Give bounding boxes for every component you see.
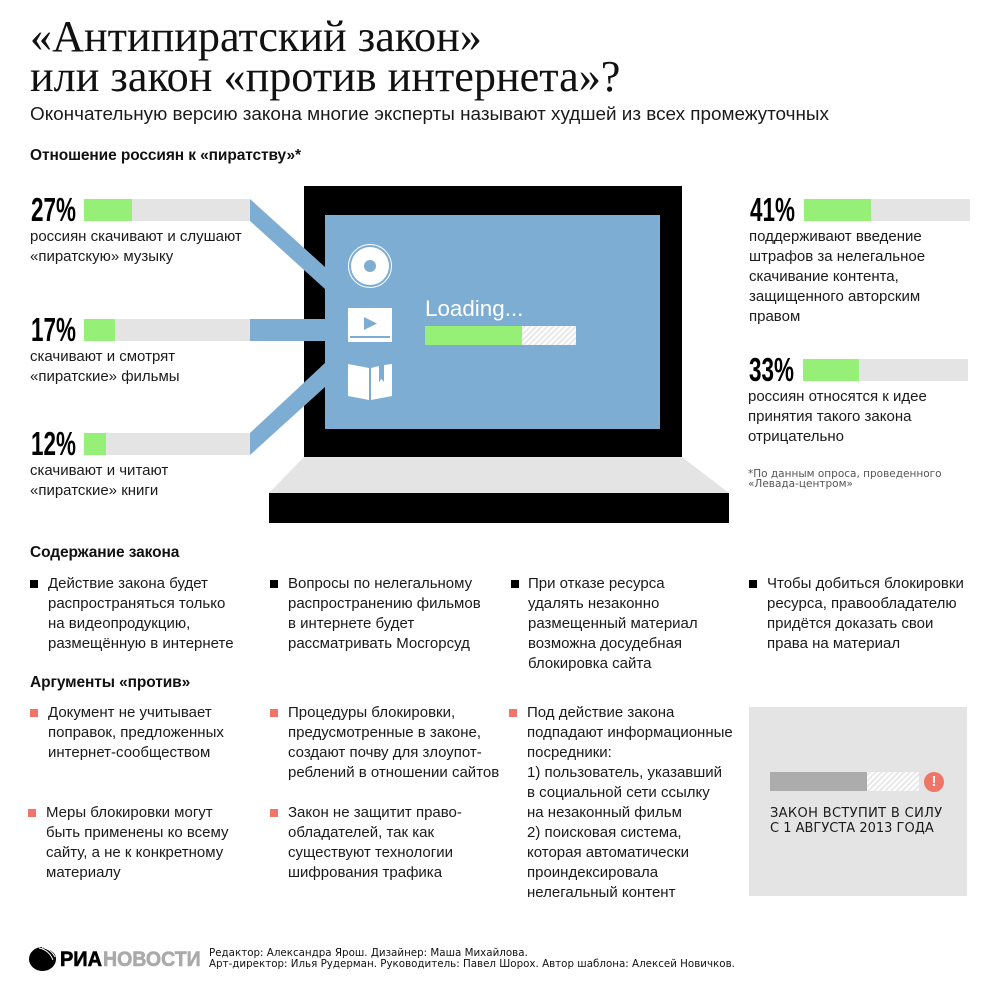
argument 3: 1) пользователь, указавший <box>527 764 722 781</box>
law item 1: распространяться только <box>48 595 225 612</box>
stat: 12% books: скачивают и читают <box>30 462 168 478</box>
argument 2: предусмотренные в законе, <box>288 724 481 741</box>
connectors from bars to icons <box>250 199 325 455</box>
stat: 17% films: «пиратские» фильмы <box>30 368 180 384</box>
stat: 27% music: россиян скачивают и слушают <box>30 228 242 244</box>
icon: warning: ! <box>932 773 936 790</box>
footnote: «Левада-центром» <box>748 478 853 490</box>
argument 3: которая автоматически <box>527 844 689 861</box>
stat: 33% negative: россиян относятся к идее <box>748 388 927 404</box>
law item 2: Вопросы по нелегальному <box>288 575 472 592</box>
argument 2: создают почву для злоупот- <box>288 744 482 761</box>
stat: 27% music: 27% <box>30 191 75 228</box>
argument 3: подпадают информационные <box>527 724 733 741</box>
argument 1: интернет-сообществом <box>48 744 210 761</box>
credits: Редактор: Александра Ярош. Дизайнер: Маша Михайлова. <box>209 947 528 959</box>
stat: 33% negative <box>748 351 968 444</box>
law item 4: ресурса, правообладателю <box>767 595 957 612</box>
argument 4: сайту, а не к конкретному <box>46 844 223 861</box>
date text <box>770 806 943 836</box>
logo: RIA Novosti: НОВОСТИ <box>103 948 201 971</box>
argument 3: на незаконный фильм <box>527 804 682 821</box>
stat: 41% fines: скачивание контента, <box>749 268 899 284</box>
argument 3: нелегальный контент <box>527 884 675 901</box>
argument 1 <box>30 704 224 761</box>
argument 1: Документ не учитывает <box>48 704 212 721</box>
law item 3: размещенный материал <box>528 615 698 632</box>
stat: 12% books: «пиратские» книги <box>30 482 158 498</box>
law item 2: рассматривать Мосгорсуд <box>288 635 470 652</box>
stat: 33% negative: отрицательно <box>748 428 844 444</box>
law item 1: Действие закона будет <box>48 575 208 592</box>
date text: ЗАКОН ВСТУПИТ В СИЛУ <box>770 806 943 821</box>
globe <box>29 947 56 971</box>
stat: 41% fines: защищенного авторским <box>749 288 920 304</box>
argument 4: материалу <box>46 864 121 881</box>
law item 3: удалять незаконно <box>528 595 659 612</box>
icon: video <box>348 308 392 342</box>
argument 3 <box>509 704 733 901</box>
argument 5: обладателей, так как <box>288 824 434 841</box>
stat: 41% fines: 41% <box>750 191 794 228</box>
argument 2: Процедуры блокировки, <box>288 704 455 721</box>
laptop body <box>269 186 729 523</box>
argument 5: шифрования трафика <box>288 864 442 881</box>
loading label: Loading... <box>425 296 523 321</box>
law item 4 <box>749 575 964 652</box>
heading: law contents: Содержание закона <box>30 544 179 561</box>
stat: 17% films: скачивают и смотрят <box>30 348 175 364</box>
stat: 12% books <box>30 425 250 498</box>
stat: 41% fines: штрафов за нелегальное <box>749 248 925 264</box>
argument 3: 2) поисковая система, <box>527 824 682 841</box>
footnote <box>748 468 942 490</box>
stat: 27% music <box>30 191 250 264</box>
stat: 27% music: «пиратскую» музыку <box>30 248 173 264</box>
heading: attitude: Отношение россиян к «пиратству»* <box>30 147 301 164</box>
argument 3: посредники: <box>527 744 612 761</box>
credits: Арт-директор: Илья Рудерман. Руководитель: Павел Шорох. Автор шаблона: Алексей Новичков. <box>209 958 735 970</box>
law item 1: размещённую в интернете <box>48 635 234 652</box>
stat: 41% fines: поддерживают введение <box>749 228 922 244</box>
argument 4: Меры блокировки могут <box>46 804 213 821</box>
date text: С 1 АВГУСТА 2013 ГОДА <box>770 821 934 836</box>
law item 4: придётся доказать свои <box>767 615 933 632</box>
title: «Антипиратский закон» <box>30 12 482 61</box>
stat: 12% books: 12% <box>30 425 75 462</box>
argument 3: в социальной сети ссылку <box>527 784 710 801</box>
wordmark: РИА <box>60 948 102 971</box>
loading bar <box>425 326 576 345</box>
stat: 41% fines <box>749 191 970 324</box>
panel: law start date <box>749 707 967 896</box>
stat: 41% fines: правом <box>749 308 800 324</box>
argument 4 <box>28 804 228 881</box>
argument 3: проиндексировала <box>527 864 658 881</box>
stat: 17% films <box>30 311 250 384</box>
argument 4: быть применены ко всему <box>46 824 228 841</box>
argument 5: существуют технологии <box>288 844 453 861</box>
law item 3: возможна досудебная <box>528 635 682 652</box>
heading: arguments against: Аргументы «против» <box>30 674 190 691</box>
argument 2 <box>270 704 499 781</box>
law item 3: блокировка сайта <box>528 655 651 672</box>
law item 4: Чтобы добиться блокировки <box>767 575 964 592</box>
argument 2: реблений в отношении сайтов <box>288 764 499 781</box>
credits <box>209 947 735 970</box>
logo: RIA Novosti <box>29 947 201 971</box>
icon: book <box>348 364 392 400</box>
law item 3 <box>511 575 698 672</box>
title: или закон «против интернета»? <box>30 52 620 101</box>
icon: disc <box>348 244 392 288</box>
law item 2: в интернете будет <box>288 615 414 632</box>
argument 3: Под действие закона <box>527 704 674 721</box>
progress bar <box>770 772 919 791</box>
law item 2: распространению фильмов <box>288 595 481 612</box>
title <box>30 12 620 101</box>
law item 2 <box>270 575 481 652</box>
law item 3: При отказе ресурса <box>528 575 665 592</box>
stat: 33% negative: принятия такого закона <box>748 408 911 424</box>
argument 5 <box>270 804 462 881</box>
law item 4: права на материал <box>767 635 900 652</box>
subtitle: Окончательную версию закона многие эксперты называют худшей из всех промежуточных <box>30 104 829 125</box>
icon: warning <box>924 772 944 792</box>
law item 1 <box>30 575 234 652</box>
stat: 33% negative: 33% <box>748 351 793 388</box>
law item 1: на видеопродукцию, <box>48 615 190 632</box>
stat: 17% films: 17% <box>30 311 75 348</box>
argument 5: Закон не защитит право- <box>288 804 462 821</box>
argument 1: поправок, предложенных <box>48 724 224 741</box>
footnote: *По данным опроса, проведенного <box>748 468 942 480</box>
